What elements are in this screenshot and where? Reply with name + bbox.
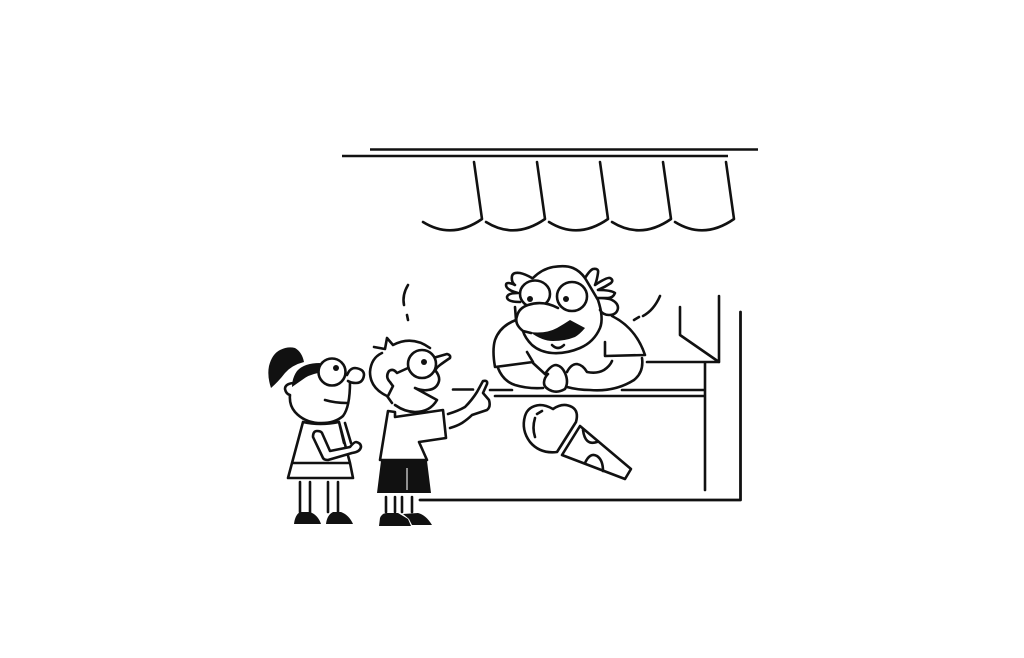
- girl head: [285, 382, 350, 423]
- girl shoes: [294, 512, 353, 524]
- scoop: [524, 405, 577, 452]
- shopkeeper hair right: [585, 269, 618, 315]
- boy legs: [386, 497, 412, 512]
- boy nose: [433, 354, 450, 371]
- boy: [370, 285, 490, 526]
- girl eye: [318, 358, 346, 386]
- shopkeeper mustache: [530, 320, 585, 341]
- shopkeeper arms: [533, 361, 612, 374]
- boy shirt: [380, 410, 446, 460]
- boy thought tick: [404, 285, 408, 320]
- girl bangs: [292, 363, 320, 387]
- shopkeeper head: [523, 266, 602, 353]
- shopkeeper smile: [552, 345, 564, 348]
- boy eye: [408, 350, 436, 378]
- shopkeeper right shoulder and sleeve: [605, 316, 645, 356]
- boy face and mouth: [395, 370, 439, 412]
- girl nose: [347, 368, 364, 383]
- girl arm: [313, 431, 361, 460]
- shopkeeper nose: [516, 303, 558, 333]
- shopkeeper speech tick: [634, 296, 660, 320]
- shopkeeper hands: [544, 365, 567, 392]
- shopkeeper: [494, 266, 660, 392]
- boy shoes: [379, 513, 432, 526]
- boy ear: [387, 368, 408, 396]
- girl hair bun: [268, 347, 304, 388]
- boy shorts: [377, 461, 431, 493]
- shopkeeper left shoulder and sleeve: [494, 320, 533, 367]
- cone spots: [583, 430, 603, 471]
- awning: [342, 150, 758, 230]
- shopkeeper hair left: [506, 273, 532, 320]
- shopkeeper lower body: [498, 358, 642, 390]
- scoop highlights: [534, 411, 542, 437]
- stand counter and frame: [420, 296, 740, 500]
- girl legs: [300, 482, 338, 512]
- boy shorts seam: [406, 468, 408, 490]
- boy arm and pointing hand: [448, 381, 490, 428]
- shopkeeper eyes: [520, 280, 587, 311]
- boy head and hair: [370, 338, 430, 403]
- girl mouth: [325, 400, 347, 403]
- ice cream cone: [524, 405, 631, 479]
- girl: [268, 347, 364, 524]
- girl dress: [288, 422, 353, 478]
- cone: [562, 426, 631, 479]
